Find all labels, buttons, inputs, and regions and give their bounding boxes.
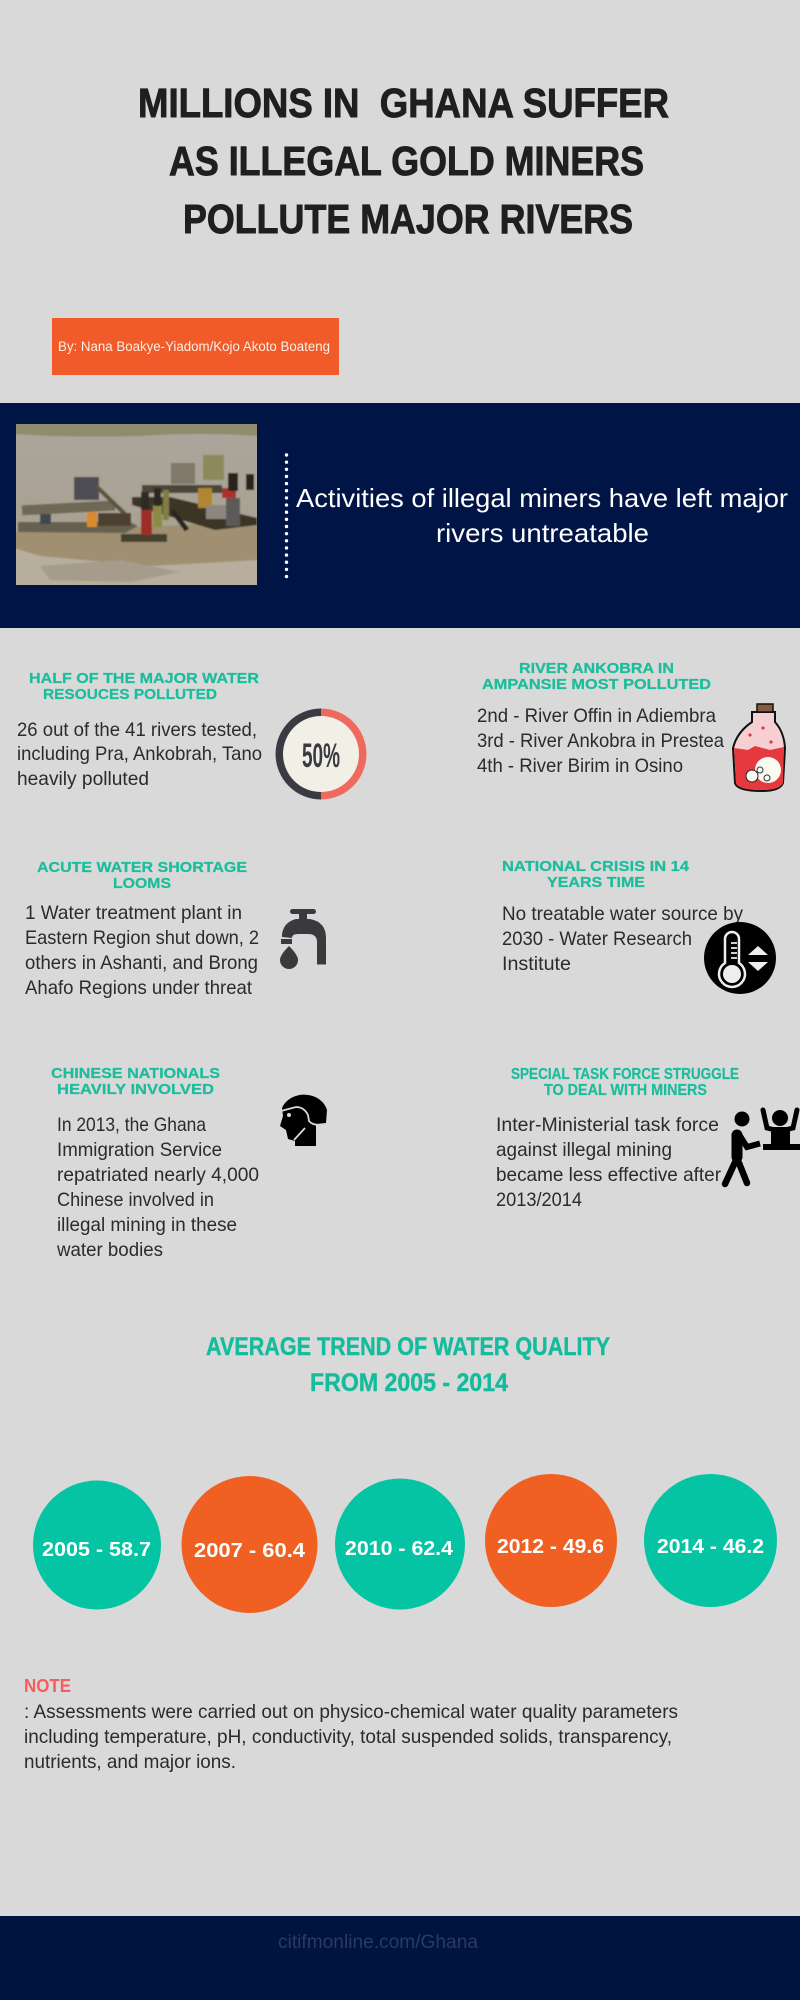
heading: AMPANSIE MOST POLLUTED bbox=[482, 676, 711, 693]
text block bbox=[17, 719, 262, 790]
panel: half of water resources polluted bbox=[17, 670, 366, 800]
heading: HALF OF THE MAJOR WATER bbox=[29, 670, 259, 687]
circle: 2010: 2010 - 62.4 bbox=[345, 1537, 454, 1560]
heading bbox=[502, 858, 690, 891]
footer: citifmonline.com/Ghana bbox=[278, 1932, 478, 1953]
panel: national crisis bbox=[502, 858, 776, 994]
text block: 1 Water treatment plant in bbox=[25, 902, 242, 924]
text block: against illegal mining bbox=[496, 1139, 672, 1161]
heading bbox=[29, 670, 259, 703]
note: including temperature, pH, conductivity, total suspended solids, transparency, bbox=[24, 1726, 672, 1748]
text block: No treatable water source by bbox=[502, 903, 743, 925]
text block: Institute bbox=[502, 953, 571, 975]
byline badge: By: Nana Boakye-Yiadom/Kojo Akoto Boateng bbox=[58, 339, 330, 354]
panel: navy banner bbox=[0, 403, 800, 628]
text block bbox=[56, 1114, 259, 1261]
text block bbox=[496, 1114, 721, 1211]
text block: Immigration Service bbox=[57, 1139, 222, 1161]
panel: chinese nationals bbox=[51, 1065, 327, 1261]
heading: CHINESE NATIONALS bbox=[51, 1065, 220, 1082]
heading bbox=[37, 859, 247, 892]
panel: river ankobra bbox=[477, 660, 785, 791]
icon: poison bottle bbox=[733, 704, 785, 791]
heading bbox=[482, 660, 711, 693]
heading: SPECIAL TASK FORCE STRUGGLE bbox=[511, 1066, 739, 1083]
text block: Eastern Region shut down, 2 bbox=[25, 927, 259, 949]
circle: 2014 bbox=[644, 1474, 777, 1607]
circle: 2012: 2012 - 49.6 bbox=[497, 1535, 604, 1558]
heading: average trend: AVERAGE TREND OF WATER QUALITY bbox=[206, 1333, 610, 1361]
chart: yearly water quality circles bbox=[33, 1474, 777, 1613]
circle: 2010 bbox=[335, 1478, 465, 1610]
heading: YEARS TIME bbox=[547, 874, 645, 891]
heading: NATIONAL CRISIS IN 14 bbox=[502, 858, 690, 875]
circle: 2005 bbox=[33, 1480, 161, 1610]
text block: water bodies bbox=[56, 1239, 163, 1261]
heading: HEAVILY INVOLVED bbox=[57, 1081, 214, 1098]
title: AS ILLEGAL GOLD MINERS bbox=[169, 138, 644, 184]
text block: Chinese involved in bbox=[57, 1189, 214, 1211]
text block: heavily polluted bbox=[17, 768, 149, 790]
title: POLLUTE MAJOR RIVERS bbox=[183, 196, 633, 242]
panel: special task force bbox=[496, 1066, 800, 1211]
banner text bbox=[296, 483, 788, 548]
text block: illegal mining in these bbox=[57, 1214, 237, 1236]
icon: gunman and surrendering figure bbox=[725, 1110, 800, 1184]
heading: average trend: FROM 2005 - 2014 bbox=[310, 1369, 508, 1397]
text block: Ahafo Regions under threat bbox=[25, 977, 253, 999]
text block: others in Ashanti, and Brong bbox=[25, 952, 258, 974]
note: NOTE bbox=[24, 1676, 71, 1696]
note bbox=[24, 1676, 678, 1773]
circle: 2005: 2005 - 58.7 bbox=[42, 1538, 151, 1561]
heading: RIVER ANKOBRA IN bbox=[519, 660, 674, 677]
text block: Inter-Ministerial task force bbox=[496, 1114, 719, 1136]
heading: average trend bbox=[206, 1333, 610, 1397]
heading: RESOUCES POLLUTED bbox=[43, 686, 217, 703]
text block: including Pra, Ankobrah, Tano bbox=[17, 743, 262, 765]
banner text: Activities of illegal miners have left major bbox=[296, 483, 788, 513]
text block: 2030 - Water Research bbox=[502, 928, 692, 950]
circle: 2007: 2007 - 60.4 bbox=[194, 1539, 306, 1562]
chart: 50% donut: 50% bbox=[302, 737, 340, 775]
chart: 50% donut bbox=[276, 708, 366, 800]
heading bbox=[51, 1065, 220, 1098]
text block: 2nd - River Offin in Adiembra bbox=[477, 705, 716, 727]
icon: dripping tap bbox=[280, 909, 326, 969]
icon: head with helmet bbox=[280, 1095, 327, 1146]
banner text: rivers untreatable bbox=[436, 518, 649, 548]
text block: repatriated nearly 4,000 bbox=[57, 1164, 259, 1186]
text block bbox=[25, 902, 259, 999]
footer bbox=[0, 1916, 800, 2000]
heading: LOOMS bbox=[113, 875, 171, 892]
note: : Assessments were carried out on physico-chemical water quality parameters bbox=[24, 1701, 678, 1723]
text block: In 2013, the Ghana bbox=[57, 1114, 206, 1136]
heading: ACUTE WATER SHORTAGE bbox=[37, 859, 247, 876]
text block: 2013/2014 bbox=[496, 1189, 582, 1211]
text block: 4th - River Birim in Osino bbox=[477, 755, 683, 777]
text block: 26 out of the 41 rivers tested, bbox=[17, 719, 257, 741]
dotted divider bbox=[285, 455, 288, 577]
icon: thermometer bbox=[704, 922, 776, 994]
heading bbox=[511, 1066, 739, 1099]
text block: 3rd - River Ankobra in Prestea bbox=[477, 730, 724, 752]
photo: mining rafts on river bbox=[14, 422, 259, 587]
note: nutrients, and major ions. bbox=[24, 1751, 236, 1773]
title bbox=[138, 80, 669, 242]
title: MILLIONS IN GHANA SUFFER bbox=[138, 80, 669, 126]
circle: 2014: 2014 - 46.2 bbox=[657, 1535, 764, 1558]
text block bbox=[502, 903, 743, 975]
byline badge bbox=[52, 318, 339, 375]
text block: became less effective after bbox=[496, 1164, 721, 1186]
panel: acute water shortage bbox=[25, 859, 326, 999]
circle: 2007 bbox=[182, 1476, 318, 1613]
heading: TO DEAL WITH MINERS bbox=[544, 1082, 707, 1099]
circle: 2012 bbox=[485, 1474, 617, 1607]
text block bbox=[477, 705, 724, 777]
